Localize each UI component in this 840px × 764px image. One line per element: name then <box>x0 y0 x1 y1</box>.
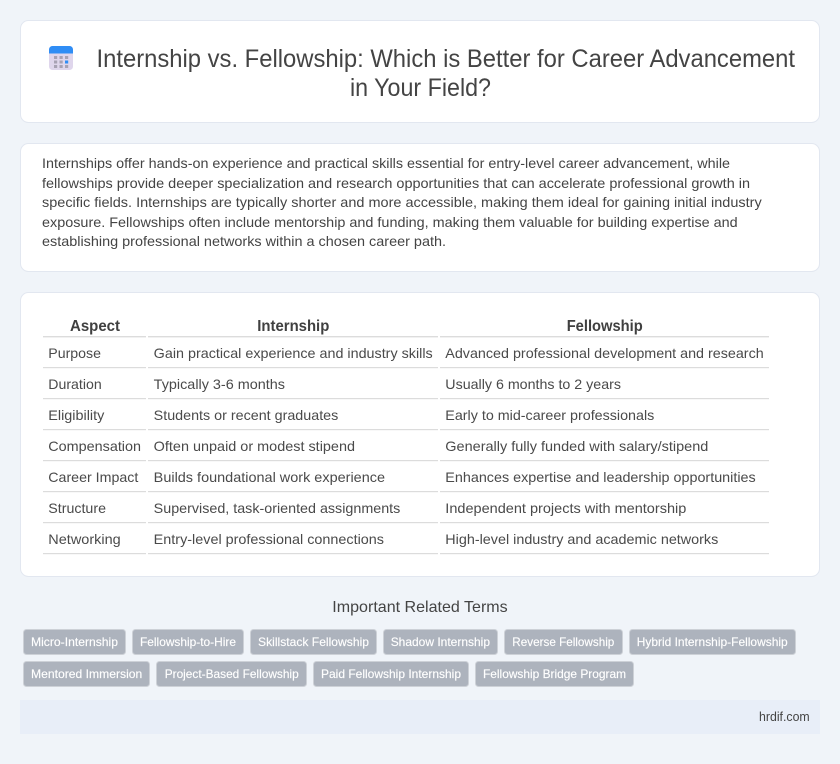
tag: Fellowship-to-Hire: Fellowship-to-Hire <box>140 635 236 649</box>
tag: Shadow Internship <box>384 630 498 654</box>
panel: introduction <box>20 144 820 272</box>
table row: Networking: Entry-level professional connections <box>154 531 384 547</box>
heading: related terms: Important Related Terms <box>332 599 508 616</box>
text block: introduction: specific fields. Internships are typically shorter and more accessible, making them ideal for gaining initial industry <box>42 194 762 210</box>
tag: Hybrid Internship-Fellowship: Hybrid Internship-Fellowship <box>637 635 788 649</box>
text block: introduction: Internships offer hands-on experience and practical skills essential for entry-level career advancement, while <box>42 155 730 171</box>
table row: Networking <box>43 531 769 554</box>
tag: Skillstack Fellowship: Skillstack Fellowship <box>258 635 369 649</box>
table row: Compensation: Generally fully funded with salary/stipend <box>445 438 708 454</box>
table header row: Internship <box>257 318 330 335</box>
text block: introduction <box>42 155 762 249</box>
table row: Eligibility: Students or recent graduates <box>154 407 338 423</box>
table row: Purpose <box>43 345 769 368</box>
table row: Structure: Independent projects with mentorship <box>445 500 687 516</box>
table row: Duration: Usually 6 months to 2 years <box>445 376 621 392</box>
table row: Purpose: Gain practical experience and industry skills <box>154 345 433 361</box>
tag: Reverse Fellowship: Reverse Fellowship <box>512 635 615 649</box>
tag: Hybrid Internship-Fellowship <box>630 630 796 654</box>
title <box>96 45 795 102</box>
tag: Fellowship Bridge Program: Fellowship Bridge Program <box>483 667 626 681</box>
table row: Career Impact <box>43 469 769 492</box>
table row: Career Impact: Enhances expertise and leadership opportunities <box>445 469 756 485</box>
panel: header <box>20 20 820 122</box>
table row: Structure: Supervised, task-oriented assignments <box>154 500 400 516</box>
tag: Micro-Internship <box>24 630 126 654</box>
table row: Eligibility: Early to mid-career professionals <box>445 407 654 423</box>
tag: Paid Fellowship Internship <box>314 662 468 686</box>
text block: introduction: exposure. Fellowships often include mentorship and funding, making them valuable for building expertise and <box>42 214 738 230</box>
tag: Fellowship-to-Hire <box>132 630 244 654</box>
table header row: Aspect <box>70 318 121 335</box>
tag: Mentored Immersion <box>24 662 150 686</box>
table row: Eligibility <box>43 407 769 430</box>
tag list: related terms <box>24 630 796 686</box>
table row: Structure: Structure <box>48 500 106 516</box>
table row: Structure <box>43 500 769 523</box>
tag: Project-Based Fellowship: Project-Based Fellowship <box>165 667 299 681</box>
table row: Networking: High-level industry and academic networks <box>445 531 718 547</box>
title: in Your Field? <box>350 74 491 102</box>
tag: Paid Fellowship Internship: Paid Fellowship Internship <box>321 667 461 681</box>
icon: calendar <box>49 46 73 70</box>
table row: Networking: Networking <box>48 531 121 547</box>
tag: Reverse Fellowship <box>504 630 622 654</box>
title: Internship vs. Fellowship: Which is Better for Career Advancement <box>96 45 795 73</box>
table header row <box>43 318 769 337</box>
tag: Mentored Immersion: Mentored Immersion <box>31 667 142 681</box>
tag: Fellowship Bridge Program <box>476 662 634 686</box>
tag: Project-Based Fellowship <box>156 662 306 686</box>
footer <box>20 700 820 734</box>
tag: Skillstack Fellowship <box>250 630 376 654</box>
text block: introduction: establishing professional networks within a chosen career path. <box>42 233 446 249</box>
table row: Duration: Typically 3-6 months <box>154 376 285 392</box>
table row: Eligibility: Eligibility <box>48 407 104 423</box>
panel: comparison table <box>20 292 820 576</box>
table header row: Fellowship <box>567 318 643 335</box>
table row: Compensation <box>43 438 769 461</box>
table row: Compensation: Compensation <box>48 438 141 454</box>
footer: hrdif.com <box>759 710 810 724</box>
table row: Compensation: Often unpaid or modest stipend <box>154 438 355 454</box>
text block: introduction: fellowships provide deeper specialization and research opportunities that can accelerate professional growth in <box>42 175 750 191</box>
table row: Duration: Duration <box>48 376 102 392</box>
table row: Career Impact: Career Impact <box>48 469 138 485</box>
table row: Career Impact: Builds foundational work experience <box>154 469 385 485</box>
table row: Purpose: Advanced professional development and research <box>445 345 764 361</box>
table row: Duration <box>43 376 769 399</box>
tag: Micro-Internship: Micro-Internship <box>31 635 118 649</box>
tag: Shadow Internship: Shadow Internship <box>391 635 490 649</box>
table row: Purpose: Purpose <box>48 345 101 361</box>
